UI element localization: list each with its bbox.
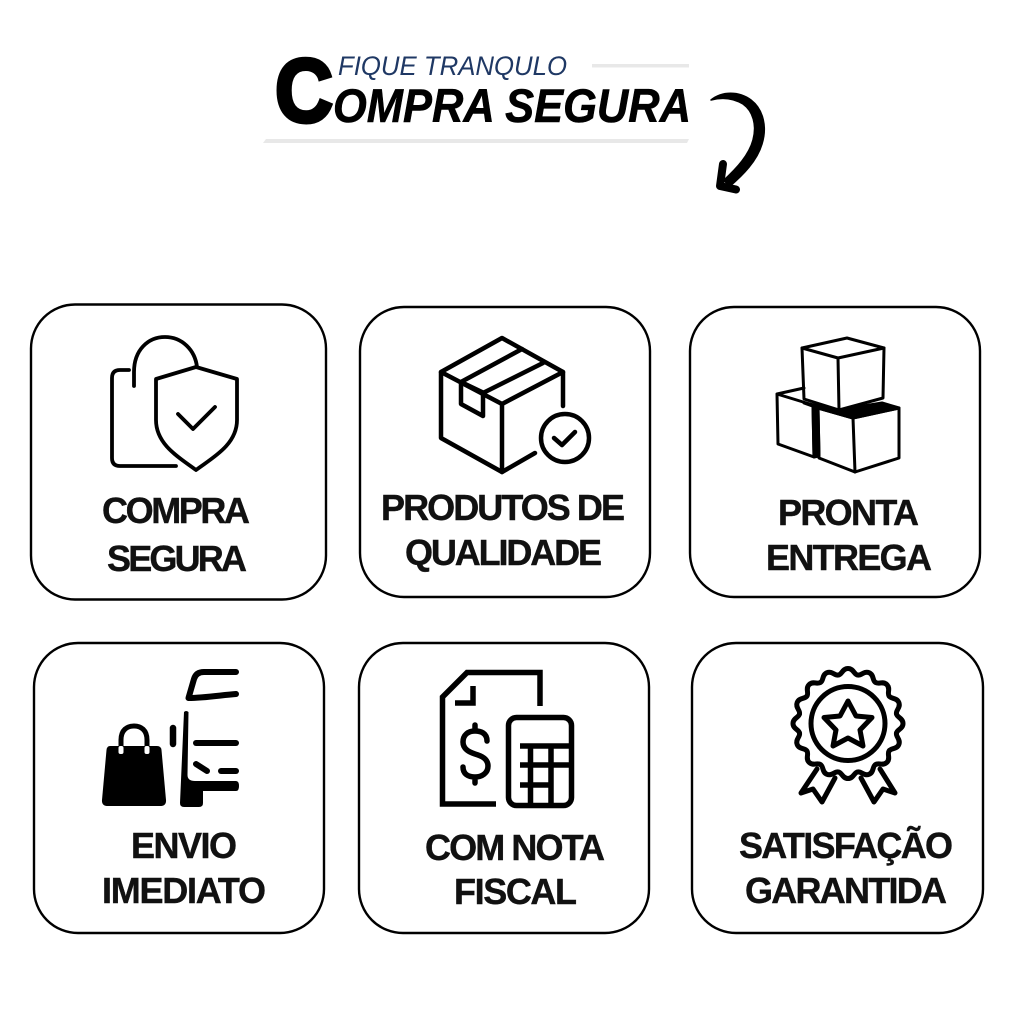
icon: shopping bag and truck xyxy=(102,672,239,807)
label: com nota fiscal: FISCAL xyxy=(454,871,577,912)
label: envio imediato: ENVIO xyxy=(131,825,237,866)
title: fique tranquilo, compra segura xyxy=(263,42,691,143)
label: satisfacao garantida: SATISFAÇÃO xyxy=(739,824,953,866)
label: satisfacao garantida xyxy=(739,824,953,911)
label: envio imediato: IMEDIATO xyxy=(102,870,266,911)
arrow pointing down to the panels xyxy=(711,93,764,190)
panel: produtos de qualidade xyxy=(360,307,650,597)
icon: rosette with star xyxy=(793,668,903,802)
icon: shopping bag xyxy=(102,726,166,806)
label: compra segura: COMPRA xyxy=(102,490,250,531)
icon: dollar sign xyxy=(463,725,488,783)
subtitle: fique tranquilo: FIQUE TRANQULO xyxy=(338,51,567,81)
label: compra segura xyxy=(102,490,250,579)
title: compra segura: OMPRA SEGURA xyxy=(333,79,691,132)
label: pronta entrega xyxy=(766,492,932,578)
label: envio imediato xyxy=(102,825,266,911)
label: produtos de qualidade: PRODUTOS DE xyxy=(381,487,625,528)
label: com nota fiscal xyxy=(425,827,605,912)
icon: stacked cubes xyxy=(777,338,899,472)
panel: com nota fiscal xyxy=(359,643,649,933)
label: produtos de qualidade xyxy=(381,487,625,573)
icon: invoice and calculator xyxy=(442,672,572,806)
label: pronta entrega: PRONTA xyxy=(778,492,919,533)
label: satisfacao garantida: GARANTIDA xyxy=(745,870,947,911)
panel: satisfacao garantida xyxy=(692,643,983,933)
label: com nota fiscal: COM NOTA xyxy=(425,827,605,868)
icon: shopping bag with shield and check xyxy=(112,337,237,470)
label: compra segura: SEGURA xyxy=(107,538,247,579)
label: pronta entrega: ENTREGA xyxy=(766,537,932,578)
panel: compra segura xyxy=(31,304,326,600)
icon: truck front xyxy=(173,672,239,807)
title: large initial C: C xyxy=(275,42,333,142)
panel: envio imediato xyxy=(34,643,324,933)
panel: pronta entrega xyxy=(690,307,980,597)
label: produtos de qualidade: QUALIDADE xyxy=(405,532,602,573)
icon: box with check xyxy=(441,338,589,472)
